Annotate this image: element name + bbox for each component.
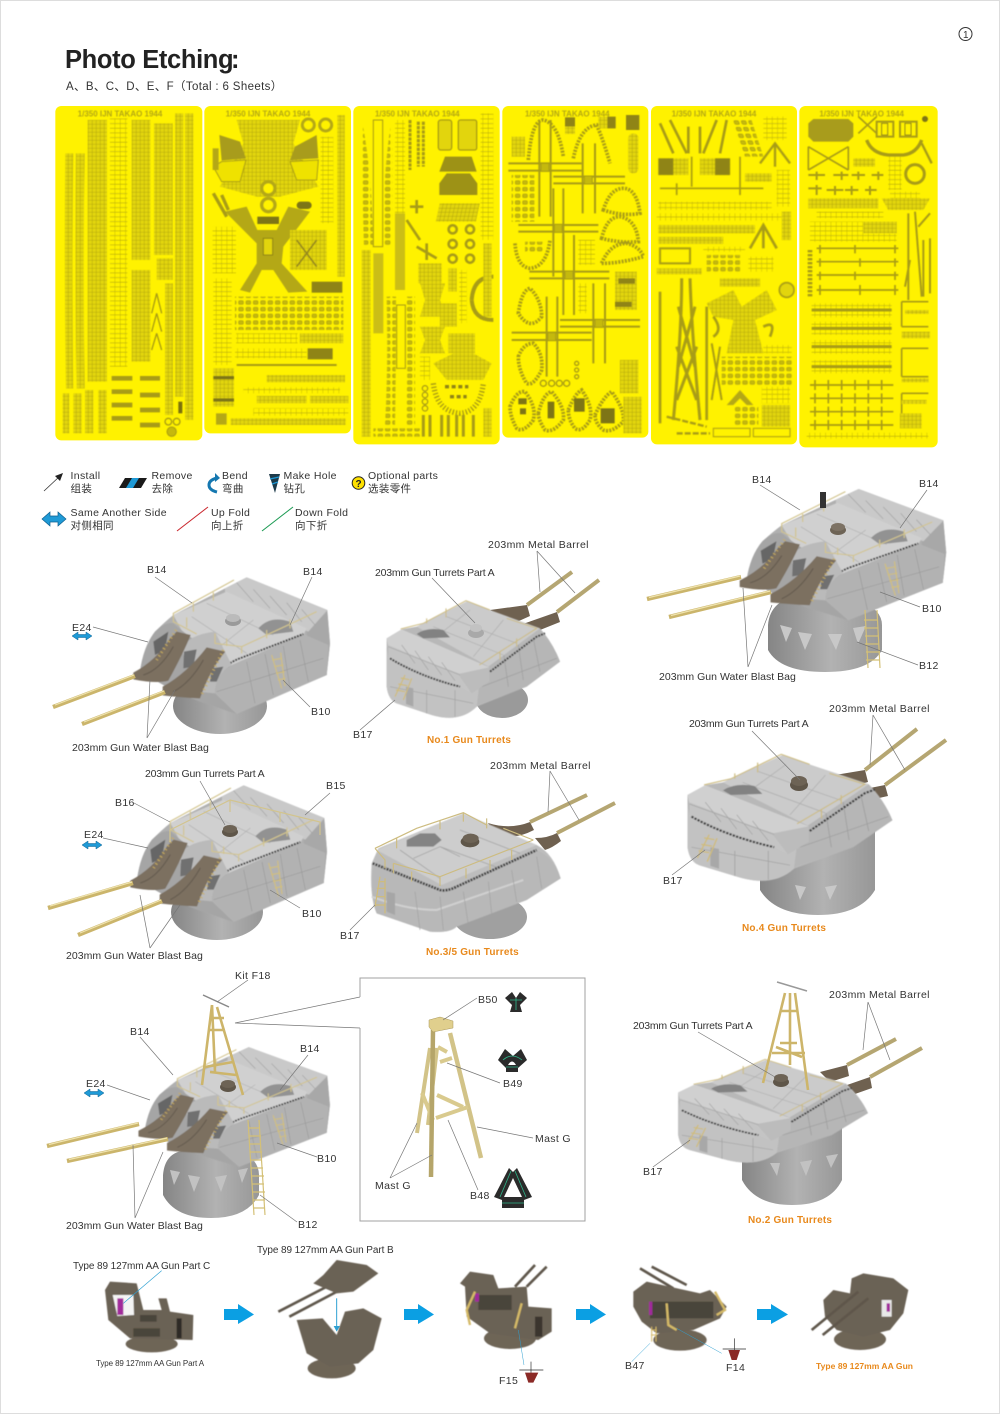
AA gun step 4 with B47 and F14: B47 xyxy=(625,1360,645,1372)
turret assembly: front view with E24: B14 xyxy=(303,566,323,578)
page number xyxy=(959,28,972,41)
AA gun step 1: part A and part C xyxy=(73,1261,210,1368)
turret: No.3/5 gun turrets: B17 xyxy=(340,930,360,942)
turret assembly: middle left with B15 B16 xyxy=(48,768,346,962)
AA gun step 4 with B47 and F14: F14 xyxy=(726,1362,745,1374)
legend: make hole: Make Hole xyxy=(284,470,337,482)
legend: remove: 去除 xyxy=(152,482,173,495)
legend: remove xyxy=(119,470,193,495)
panel: mast detail box: Mast G xyxy=(535,1133,571,1145)
mast detail drawing xyxy=(417,1017,481,1177)
turret: No.2 gun turret with mast: No.2 Gun Turrets xyxy=(748,1215,832,1226)
turret: No.2 gun turret with mast xyxy=(633,982,930,1226)
turret assembly: middle left with B15 B16: 203mm Gun Water Blast Bag xyxy=(66,950,203,962)
AA gun step 3 with F15 xyxy=(460,1265,552,1387)
turret assembly: middle left with B15 B16: E24 xyxy=(84,829,104,841)
turret assembly: top right with B12 ladder: 203mm Gun Water Blast Bag xyxy=(659,671,796,683)
legend: up fold: 向上折 xyxy=(211,519,244,532)
AA gun step 2: part B: Type 89 127mm AA Gun Part B xyxy=(257,1245,394,1256)
legend: optional parts: ? xyxy=(356,479,362,490)
turret assembly: bottom left with mast: B14 xyxy=(130,1026,150,1038)
turret: No.1 gun turret rear view: B17 xyxy=(353,729,373,741)
turret assembly: bottom left with mast: 203mm Gun Water Blast Bag xyxy=(66,1220,203,1232)
turret: No.3/5 gun turrets: 203mm Metal Barrel xyxy=(490,760,591,772)
turret assembly: top right with B12 ladder: B12 xyxy=(919,660,939,672)
title: Photo Etching xyxy=(65,46,233,74)
panel: mast detail box: Mast G xyxy=(375,1180,411,1192)
turret assembly: front view with E24: B14 xyxy=(147,564,167,576)
turret: No.3/5 gun turrets: No.3/5 Gun Turrets xyxy=(426,947,519,958)
mast on turret xyxy=(763,982,808,1090)
turret: No.1 gun turret rear view xyxy=(353,539,599,746)
AA gun step 3 with F15: F15 xyxy=(499,1375,518,1387)
turret assembly: front view with E24 xyxy=(53,564,331,754)
arrow 3 xyxy=(576,1304,606,1324)
arrow 2 xyxy=(404,1304,434,1324)
legend: bend xyxy=(209,470,248,495)
AA gun step 4 with B47 and F14 xyxy=(625,1267,746,1374)
panel: photo etching sheet F: 1/350 IJN TAKAO 1944 xyxy=(819,110,905,119)
turret assembly: middle left with B15 B16: 203mm Gun Turrets Part A xyxy=(145,768,265,780)
turret assembly: front view with E24: B10 xyxy=(311,706,331,718)
arrow 1 xyxy=(224,1304,254,1324)
panel: photo etching sheet E xyxy=(651,106,797,444)
legend xyxy=(42,470,438,532)
turret: No.3/5 gun turrets xyxy=(340,760,615,958)
turret assembly: bottom left with mast: B12 xyxy=(298,1219,318,1231)
panel: mast detail box: B50 xyxy=(478,994,498,1006)
panel: photo etching sheet B: 1/350 IJN TAKAO 1944 xyxy=(226,110,311,119)
turret assembly: bottom left with mast: Kit F18 xyxy=(235,970,271,982)
page number: 1 xyxy=(963,30,969,41)
legend: down fold: Down Fold xyxy=(295,507,348,519)
legend: same another side: Same Another Side xyxy=(70,507,167,519)
legend: bend: Bend xyxy=(222,470,248,482)
part icon: B48 xyxy=(494,1168,532,1208)
AA gun step 1: part A and part C: Type 89 127mm AA Gun Part C xyxy=(73,1261,210,1272)
legend: down fold: 向下折 xyxy=(295,519,328,532)
turret assembly: top right with B12 ladder xyxy=(647,474,946,683)
turret assembly: bottom left with mast: B10 xyxy=(317,1153,337,1165)
turret: No.4 gun turret: 203mm Metal Barrel xyxy=(829,703,930,715)
turret: No.4 gun turret: B17 xyxy=(663,875,683,887)
legend: optional parts: Optional parts xyxy=(368,470,438,482)
panel: photo etching sheet A xyxy=(55,106,202,440)
turret: No.1 gun turret rear view: No.1 Gun Turrets xyxy=(427,735,511,746)
legend: same another side: 对侧相同 xyxy=(70,519,114,532)
legend: optional parts xyxy=(352,470,438,495)
turret assembly: middle left with B15 B16: B15 xyxy=(326,780,346,792)
turret assembly: front view with E24: 203mm Gun Water Blast Bag xyxy=(72,742,209,754)
panel: photo etching sheet C xyxy=(353,106,500,444)
AA gun step 2: part B xyxy=(257,1245,394,1378)
panel: mast detail box xyxy=(360,978,585,1221)
turret assembly: top right with B12 ladder: B14 xyxy=(752,474,772,486)
AA gun finished xyxy=(812,1273,913,1371)
mast on turret xyxy=(202,995,243,1095)
panel: photo etching sheet A: 1/350 IJN TAKAO 1944 xyxy=(78,110,163,119)
AA gun step 1: part A and part C: Type 89 127mm AA Gun Part A xyxy=(96,1359,205,1368)
legend: down fold xyxy=(262,507,348,532)
turret: No.1 gun turret rear view: 203mm Metal Barrel xyxy=(488,539,589,551)
turret: No.2 gun turret with mast: 203mm Metal Barrel xyxy=(829,989,930,1001)
panel: photo etching sheet D xyxy=(502,106,648,438)
part icon: B49 xyxy=(498,1049,527,1072)
turret assembly: front view with E24: E24 xyxy=(72,622,92,634)
turret: No.2 gun turret with mast: B17 xyxy=(643,1166,663,1178)
legend: same another side xyxy=(42,507,167,532)
panel: photo etching sheet B xyxy=(204,106,351,433)
legend: optional parts: 选装零件 xyxy=(368,482,411,495)
panel: mast detail box: B48 xyxy=(470,1190,490,1202)
legend: bend: 弯曲 xyxy=(222,482,244,495)
turret: No.2 gun turret with mast: 203mm Gun Turrets Part A xyxy=(633,1020,753,1032)
turret: No.1 gun turret rear view: 203mm Gun Turrets Part A xyxy=(375,567,495,579)
panel: photo etching sheet C: 1/350 IJN TAKAO 1944 xyxy=(375,110,460,119)
legend: remove: Remove xyxy=(152,470,193,482)
panel: photo etching sheet D: 1/350 IJN TAKAO 1944 xyxy=(525,110,610,119)
turret assembly: middle left with B15 B16: B16 xyxy=(115,797,135,809)
part icon: B50 xyxy=(505,992,527,1012)
legend: up fold: Up Fold xyxy=(211,507,250,519)
turret assembly: bottom left with mast xyxy=(47,970,360,1232)
turret assembly: middle left with B15 B16: B10 xyxy=(302,908,322,920)
legend: install: 组装 xyxy=(70,482,92,495)
turret assembly: bottom left with mast: B14 xyxy=(300,1043,320,1055)
turret assembly: top right with B12 ladder: B14 xyxy=(919,478,939,490)
panel: photo etching sheet F xyxy=(799,106,938,447)
legend: install: Install xyxy=(70,470,100,482)
panel: mast detail box: B49 xyxy=(503,1078,523,1090)
turret assembly: top right with B12 ladder: B10 xyxy=(922,603,942,615)
turret: No.4 gun turret: No.4 Gun Turrets xyxy=(742,923,826,934)
legend: make hole: 钻孔 xyxy=(284,482,305,495)
turret assembly: bottom left with mast: E24 xyxy=(86,1078,106,1090)
panel: photo etching sheet E: 1/350 IJN TAKAO 1944 xyxy=(672,110,757,119)
turret: No.4 gun turret: 203mm Gun Turrets Part A xyxy=(689,718,809,730)
AA gun finished: Type 89 127mm AA Gun xyxy=(816,1361,913,1371)
arrow 4 xyxy=(757,1304,788,1324)
legend: make hole xyxy=(269,470,337,495)
legend: up fold xyxy=(177,507,250,532)
subtitle: sheet list: A、B、C、D、E、F（Total : 6 Sheets） xyxy=(66,80,283,93)
title: : xyxy=(231,46,239,74)
turret: No.4 gun turret xyxy=(663,703,946,934)
legend: install xyxy=(44,470,100,495)
